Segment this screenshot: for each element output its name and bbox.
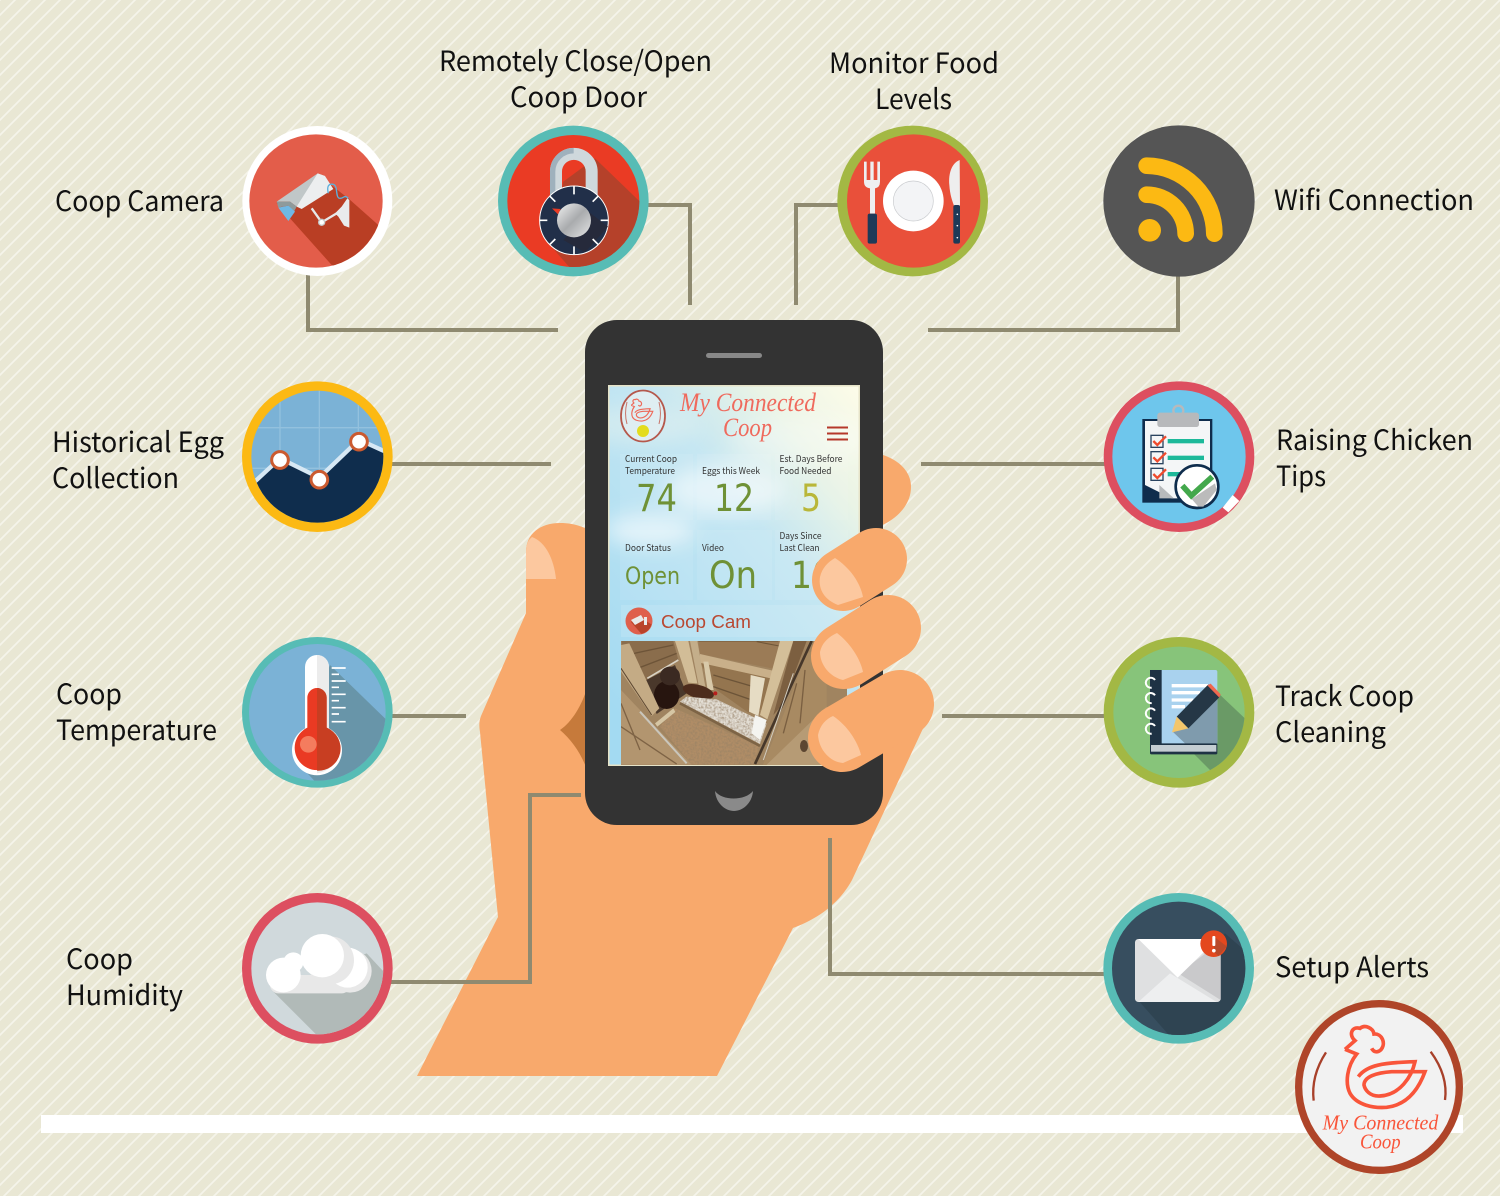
label: coop temperature: Temperature [56,709,217,749]
logo badge: Coop [1360,1131,1401,1153]
connector: temperature [391,714,466,718]
phone body [585,320,883,825]
label: wifi: Wifi Connection [1274,179,1474,219]
stat values: 74 [636,477,677,520]
palm fold shadow [560,688,587,770]
connector: cleaning [942,714,1106,718]
connector: camera [308,274,558,330]
footer bar [41,1115,1463,1133]
stat labels: Current Coop [625,452,677,465]
home button [715,791,753,811]
label: coop humidity [66,938,183,1014]
icon: coop camera [242,126,392,282]
app logo [621,390,665,442]
app title: My Connected [679,388,817,417]
label: coop temperature: Coop [56,673,122,713]
stat labels: Last Clean [780,541,820,554]
logo badge: My Connected [1322,1112,1439,1134]
label: remote door: Coop Door [510,76,647,116]
stat labels: Video [702,541,724,554]
icon: thermometer [242,637,393,788]
stat labels: Days Since [780,529,822,542]
finger behind phone [880,454,911,526]
label: historical egg collection: Historical Egg [52,421,224,461]
label: monitor food: Levels [875,78,952,118]
stat labels: Temperature [625,464,675,477]
stat labels: Food Needed [780,464,832,477]
label: raising chicken tips [1276,419,1473,495]
icon: egg chart [242,381,393,532]
label: monitor food [829,42,999,118]
stat labels: Est. Days Before [780,452,843,465]
label: remote door: Remotely Close/Open [439,40,712,80]
icon: tips clipboard [1104,381,1254,532]
stat cards [620,454,848,600]
stat values: 10 [791,554,833,597]
stat labels [625,452,843,554]
finger 2 [820,628,888,680]
stat values: 12 [714,477,754,520]
icon: humidity cloud [242,893,393,1044]
logo badge [1299,1004,1459,1170]
connector: food [796,205,840,305]
connector: humidity [391,795,581,982]
menu icon [827,428,848,440]
icon: plate and cutlery [837,126,988,276]
coop cam mini icon [626,608,652,634]
label: track coop cleaning [1275,675,1414,751]
label: monitor food: Monitor Food [829,42,999,82]
stat values: Open [625,562,680,590]
coop camera photo [620,640,850,768]
stat values [625,477,833,597]
icon: alert envelope [1103,893,1254,1044]
connector: wifi [928,274,1178,330]
finger 1 [820,558,876,605]
screen [608,385,860,766]
label: track coop cleaning: Cleaning [1275,711,1386,751]
finger 3 nail [818,716,861,763]
stat values: On [709,554,757,597]
stat labels: Eggs this Week [702,464,760,477]
coop cam header [621,605,750,637]
label: track coop cleaning: Track Coop [1275,675,1414,715]
screen: Coop [723,413,772,442]
hand holding the phone [417,500,934,1076]
thumb nail [526,537,556,579]
finger 2 nail [820,633,863,680]
connector: alerts [830,838,1106,974]
stat labels: Door Status [625,541,671,554]
finger 1 nail [820,558,863,605]
connector: eggs [391,462,551,466]
coop cam header: Coop Cam [661,611,751,632]
label: historical egg collection [52,421,224,497]
icon: padlock [498,126,649,282]
finger 3 [818,704,900,763]
label: coop humidity: Humidity [66,974,183,1014]
label: raising chicken tips: Tips [1276,455,1326,495]
label: remote door [439,40,712,116]
connector: door [647,205,690,305]
stat values: 5 [801,477,821,520]
label: setup alerts: Setup Alerts [1275,946,1429,986]
label: historical egg collection: Collection [52,457,179,497]
phone [580,320,883,825]
label: coop camera: Coop Camera [55,180,224,220]
connector: tips [921,462,1106,466]
icon: wifi signal [1103,125,1255,277]
label: coop temperature [56,673,217,749]
icon: notebook and pencil [1104,637,1254,788]
label: raising chicken tips: Raising Chicken [1276,419,1473,459]
phone speaker [706,353,762,358]
label: coop humidity: Coop [66,938,133,978]
